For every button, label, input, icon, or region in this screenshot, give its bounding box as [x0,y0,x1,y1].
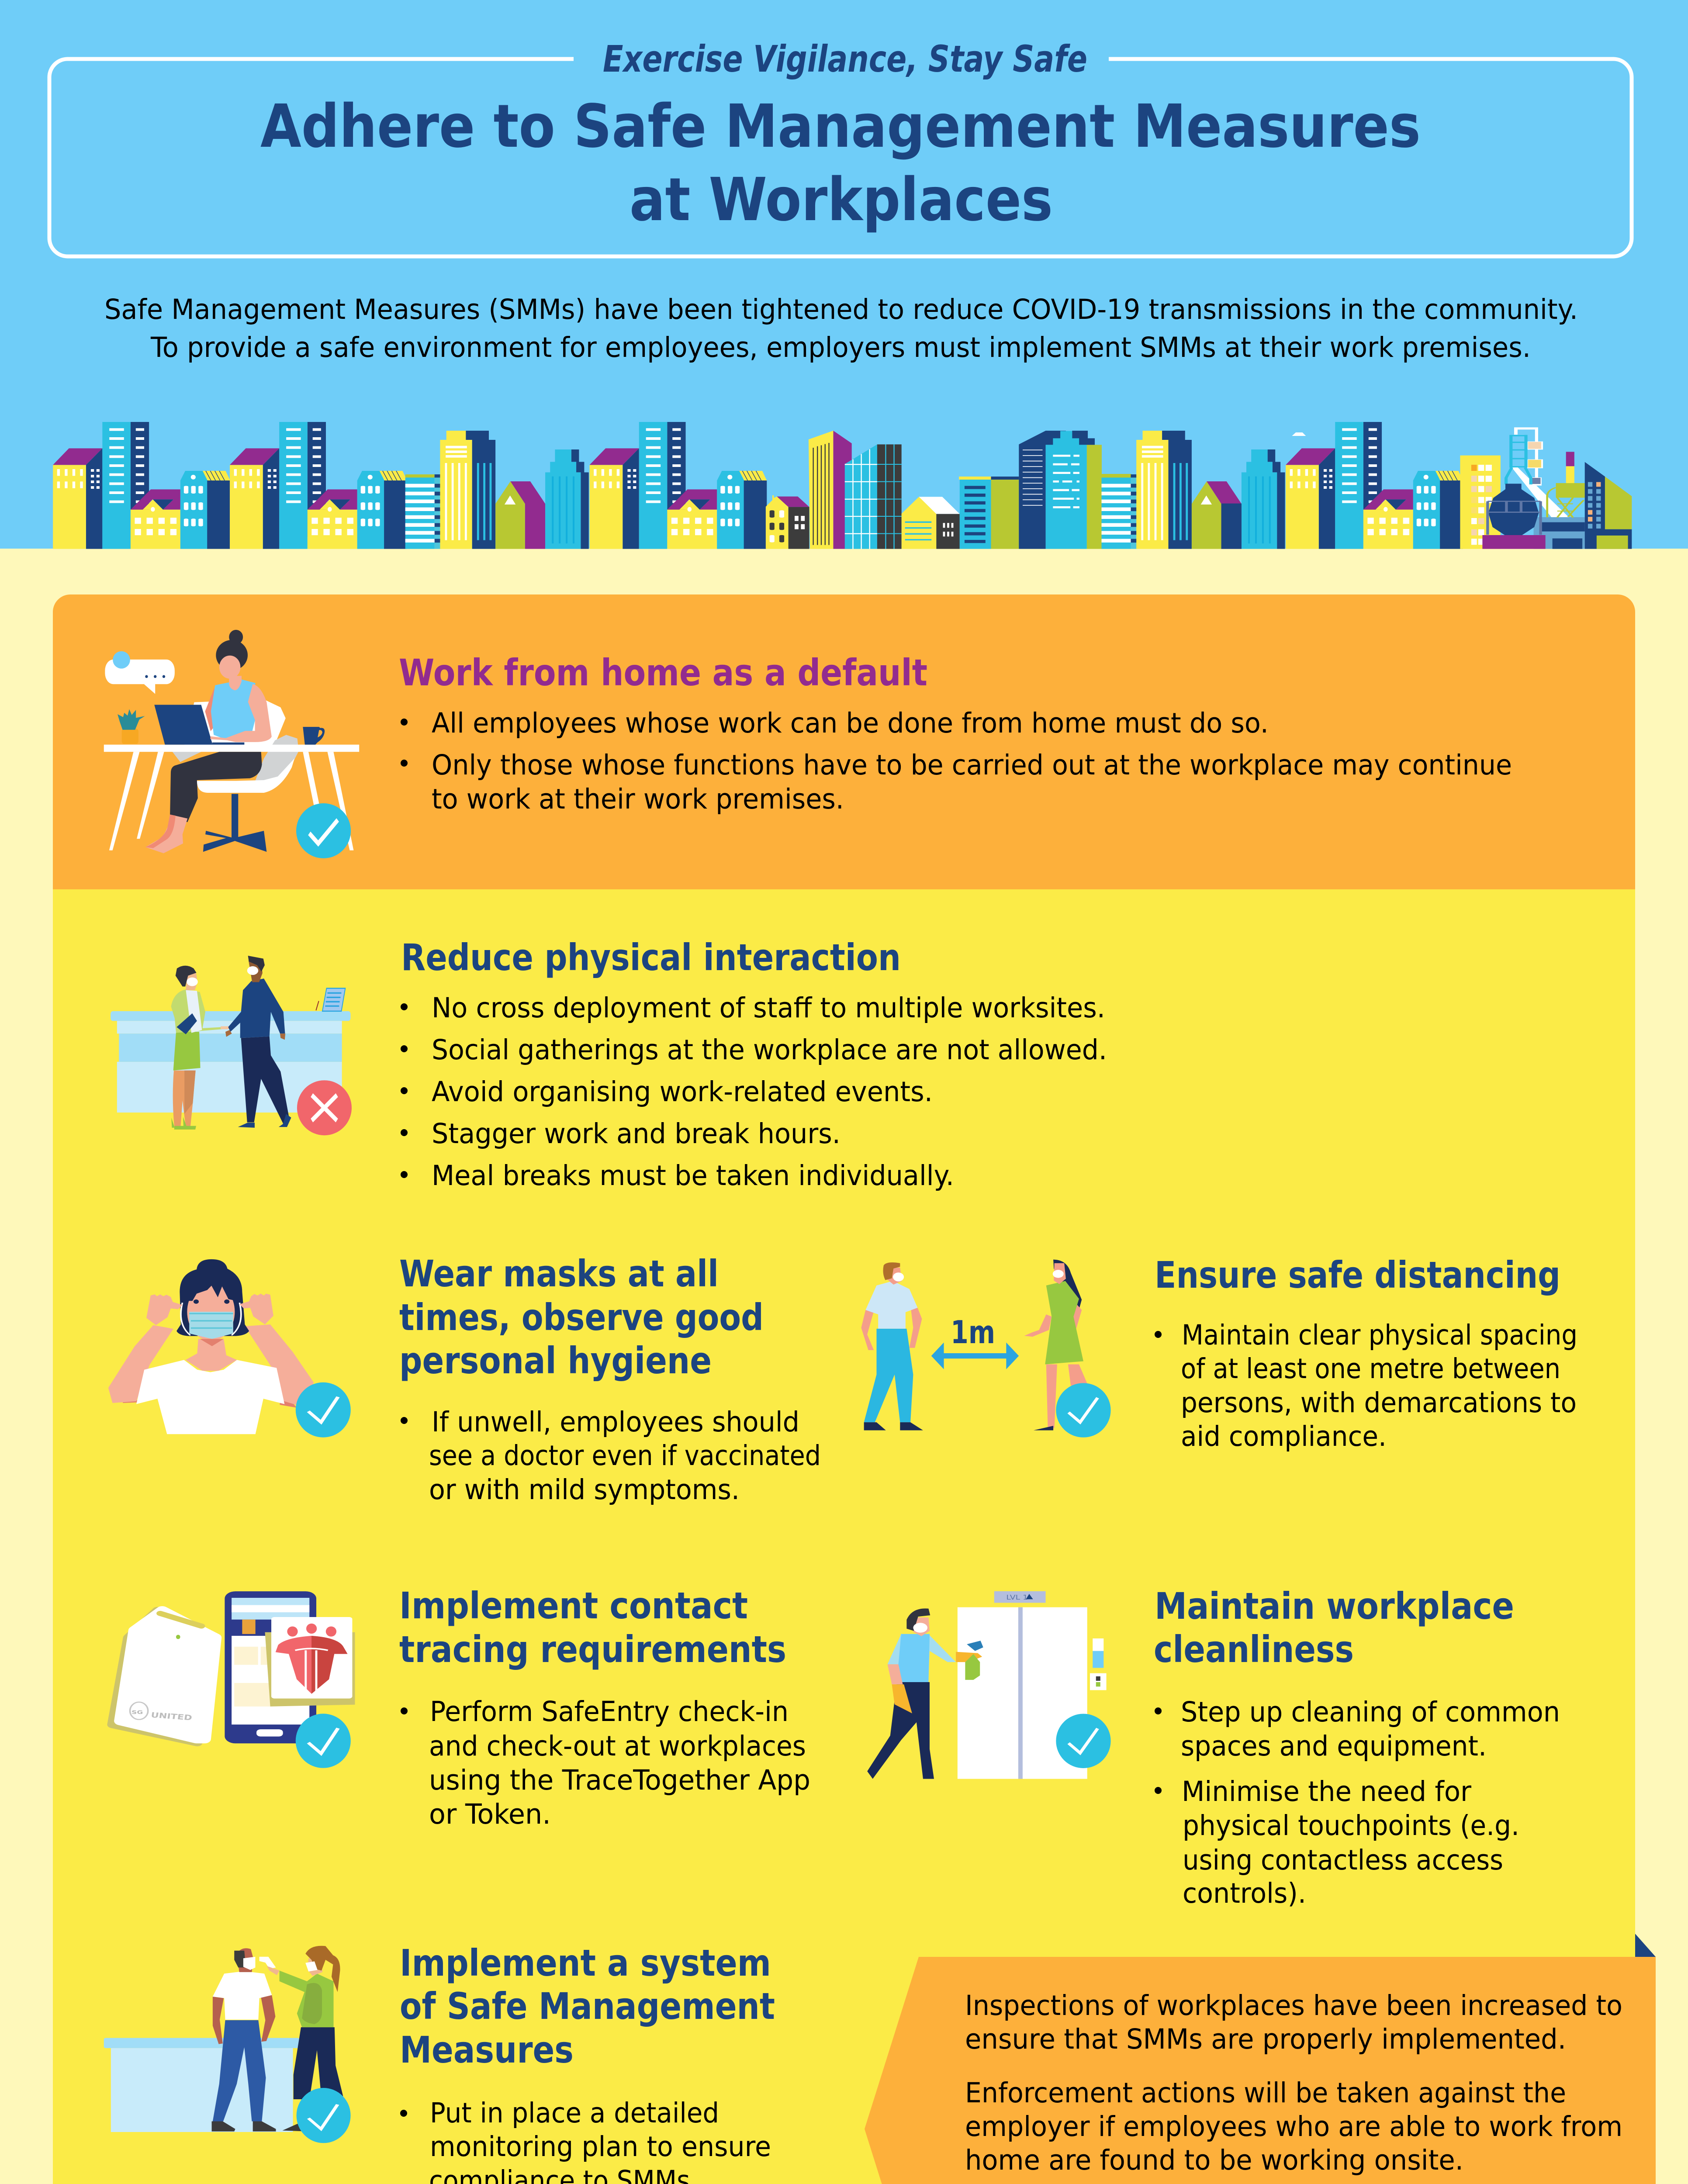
bullet list: Minimise the need for [1182,1776,1471,1807]
bullet text: of at least one metre between [1181,1353,1560,1385]
bullet text: using the TraceTogether App [429,1764,810,1796]
callout: inspections and enforcement: Inspections of workplaces have been increased to [965,1990,1622,2022]
intro paragraph: To provide a safe environment for employees, employers must implement SMMs at their work premises. [150,332,1531,363]
bullet text [401,1406,821,1506]
bullet list: No cross deployment of staff to multiple worksites. [432,992,1105,1024]
bullet text: Perform SafeEntry check-in [430,1696,789,1728]
heading: Maintain workplace [1155,1585,1514,1628]
panel: work from home [104,630,1512,858]
bullet text: If unwell, employees should [432,1406,799,1438]
bullet text: and check-out at workplaces [429,1730,806,1762]
bullet list: spaces and equipment. [1181,1730,1487,1762]
bullet list [401,992,1107,1192]
bullet list: Only those whose functions have to be carried out at the workplace may continue [432,749,1512,781]
icon: token and phone: UNITED [150,1711,193,1722]
intro paragraph: Safe Management Measures (SMMs) have been tightened to reduce COVID-19 transmissions in the community. [104,294,1578,325]
callout: inspections and enforcement: Enforcement actions will be taken against the [965,2077,1566,2109]
heading: Wear masks at all [399,1252,719,1295]
bullet list [401,707,1512,815]
panel: system of safe management [104,1942,785,2184]
bullet list: Stagger work and break hours. [432,1118,841,1150]
heading: Measures [400,2028,574,2071]
heading: cleanliness [1154,1628,1354,1671]
bullet text: aid compliance. [1181,1420,1387,1452]
icon: woman putting on mask [108,1259,351,1438]
icon: double arrow [931,1342,1019,1369]
panel: workplace cleanliness [867,1585,1560,1909]
panel: contact tracing [113,1584,810,1830]
bullet list: monitoring plan to ensure [430,2131,771,2163]
main card background [53,594,1635,2184]
icon: woman working at desk [104,630,359,858]
heading [400,1942,775,2071]
bullet list: Avoid organising work-related events. [432,1076,933,1108]
bullet text: Maintain clear physical spacing [1182,1319,1577,1351]
heading: Reduce physical interaction [401,936,901,979]
bullet text [1155,1319,1577,1452]
panel: wear masks [108,1252,821,1506]
skyline illustration [53,422,1632,549]
tagline: Exercise Vigilance, Stay Safe [603,38,1087,80]
bullet list: Step up cleaning of common [1181,1696,1560,1728]
intro paragraph [104,294,1578,363]
heading: tracing requirements [399,1628,786,1671]
bullet text: or with mild symptoms. [429,1474,740,1506]
main title line two: at Workplaces [630,166,1053,235]
main title line one: Adhere to Safe Management Measures [260,92,1421,161]
icon: two people at counter with cross [111,956,352,1135]
distance label: 1m [951,1314,995,1351]
callout: inspections and enforcement [865,1934,1656,2184]
callout: inspections and enforcement: home are found to be working onsite. [965,2144,1463,2176]
heading [1154,1585,1514,1671]
icon: two people 1m apart [861,1260,1111,1438]
bullet list: All employees whose work can be done from home must do so. [432,707,1269,739]
heading: Implement a system [400,1942,771,1984]
heading: of Safe Management [400,1985,775,2028]
bullet text: or Token. [429,1798,551,1830]
panel: safe distancing [861,1254,1577,1452]
icon: cleaner at lift [867,1591,1111,1779]
bullet text [401,1696,810,1830]
bullet list [1155,1696,1560,1909]
icon: token and phone: SG [131,1710,143,1715]
icon: token and phone [113,1591,355,1768]
bullet list: controls). [1183,1877,1306,1909]
heading: Work from home as a default [399,651,927,694]
heading: times, observe good [399,1296,764,1339]
bullet list: Social gatherings at the workplace are not allowed. [432,1034,1107,1066]
heading: Ensure safe distancing [1155,1254,1560,1296]
icon: temperature check [104,1946,351,2143]
icon: cleaner at lift: LVL 1 [1006,1594,1028,1602]
bullet text: see a doctor even if vaccinated [429,1440,821,1472]
header title frame [49,38,1632,256]
callout: inspections and enforcement: ensure that SMMs are properly implemented. [965,2023,1566,2055]
bullet text: persons, with demarcations to [1181,1387,1577,1419]
heading: personal hygiene [399,1339,712,1382]
heading [399,1252,764,1382]
bullet list: Put in place a detailed [430,2097,719,2129]
heading: Implement contact [399,1584,748,1627]
callout: inspections and enforcement: employer if employees who are able to work from [965,2111,1622,2143]
bullet list: to work at their work premises. [432,783,844,815]
bullet list: using contactless access [1183,1844,1503,1876]
heading [399,1584,786,1671]
bullet list: Meal breaks must be taken individually. [432,1160,954,1192]
panel: reduce physical interaction [111,936,1107,1192]
bullet list: physical touchpoints (e.g. [1183,1810,1519,1842]
bullet list [400,2097,785,2184]
